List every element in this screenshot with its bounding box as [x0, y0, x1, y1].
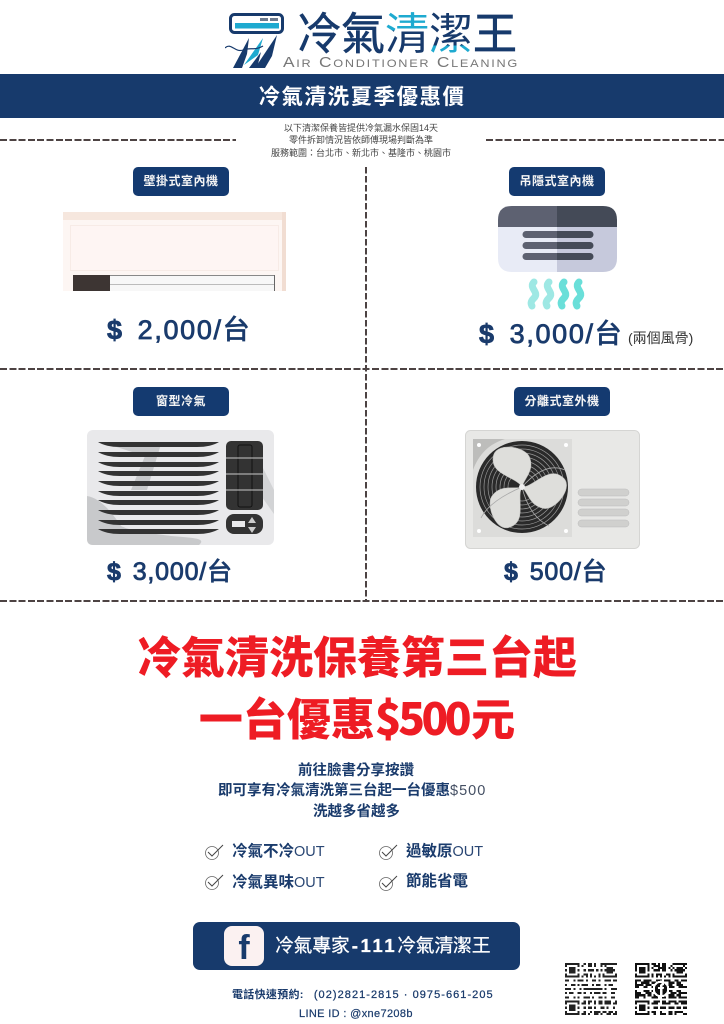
promo headline: 冷氣清洗保養第三台起 [137, 622, 577, 686]
price note: (兩個風骨) [628, 330, 693, 346]
price: window type: 3,000/台 [133, 558, 233, 586]
icon: facebook: f [238, 929, 250, 967]
icon: check 1 [205, 844, 224, 860]
facebook banner [193, 922, 520, 970]
tag: ceiling concealed [509, 167, 605, 196]
QR code: Facebook [635, 963, 687, 1015]
price: window type: $ [107, 558, 122, 586]
QR code: LINE [565, 963, 617, 1015]
title banner: 冷氣清洗夏季優惠價 [258, 85, 466, 109]
icon: ceiling air conditioner [498, 206, 617, 310]
panel: window unit [87, 387, 274, 586]
icon: outdoor unit with fan [465, 430, 640, 549]
icon: check 2 [379, 844, 398, 860]
intro notes [271, 123, 451, 158]
price: ceiling concealed: $ [479, 319, 496, 349]
tag: window type [133, 387, 229, 416]
share line 2: 即可享有冷氣清洗第三台起一台優惠$500 [218, 783, 486, 799]
intro notes: 以下清潔保養皆提供冷氣漏水保固14天 [284, 123, 438, 133]
price: wall mounted: $ [107, 315, 124, 345]
benefit 2: 過敏原OUT [406, 843, 483, 860]
price: outdoor unit: 500/台 [530, 558, 607, 586]
panel: wall mounted indoor unit [63, 167, 286, 345]
icon: check 4 [379, 876, 398, 891]
tag: outdoor unit: 分離式室外機 [524, 394, 600, 408]
tag: window type: 窗型冷氣 [156, 394, 206, 408]
tag: ceiling concealed: 吊隱式室內機 [519, 174, 594, 188]
facebook share text [218, 762, 486, 820]
price: wall mounted: 2,000/台 [138, 315, 251, 345]
icon: check 3 [205, 874, 224, 890]
tag: outdoor unit [514, 387, 610, 416]
logo icon: air conditioner with sails [225, 13, 284, 68]
logo wordmark: 冷氣清潔王 [297, 10, 517, 59]
facebook page name: 冷氣專家-111冷氣清潔王 [275, 935, 491, 956]
price: outdoor unit: $ [504, 558, 519, 586]
share line 3: 洗越多省越多 [313, 804, 400, 820]
price: ceiling concealed: 3,000/台 [510, 319, 623, 349]
promo headline: 一台優惠$500元 [199, 684, 515, 748]
icon: facebook [224, 926, 264, 966]
icon: wall air conditioner [63, 212, 286, 291]
intro notes: 零件拆卸情況皆依師傅現場判斷為準 [289, 135, 433, 145]
icon: window air conditioner [87, 430, 274, 545]
benefit 1: 冷氣不冷OUT [232, 843, 325, 860]
benefit 3: 冷氣異味OUT [232, 874, 325, 891]
intro notes: 服務範圍：台北市、新北市、基隆市、桃園市 [271, 148, 451, 158]
panel: outdoor split unit [465, 387, 640, 586]
phone numbers: 電話快速預約: (02)2821-2815 · 0975-661-205 [232, 989, 494, 1001]
benefits checklist [205, 842, 483, 891]
panel: concealed ceiling unit [478, 167, 693, 349]
tag: wall mounted: 壁掛式室內機 [143, 174, 218, 188]
benefit 4: 節能省電 [406, 873, 468, 890]
title banner [0, 74, 724, 118]
tag: wall mounted [133, 167, 229, 196]
contact details [232, 988, 494, 1020]
share line 1: 前往臉書分享按讚 [298, 763, 414, 779]
logo subtitle: Air Conditioner Cleaning [283, 54, 519, 71]
logo [225, 10, 519, 71]
line id: LINE ID : @xne7208b [299, 1008, 413, 1020]
promo headline [137, 622, 577, 748]
